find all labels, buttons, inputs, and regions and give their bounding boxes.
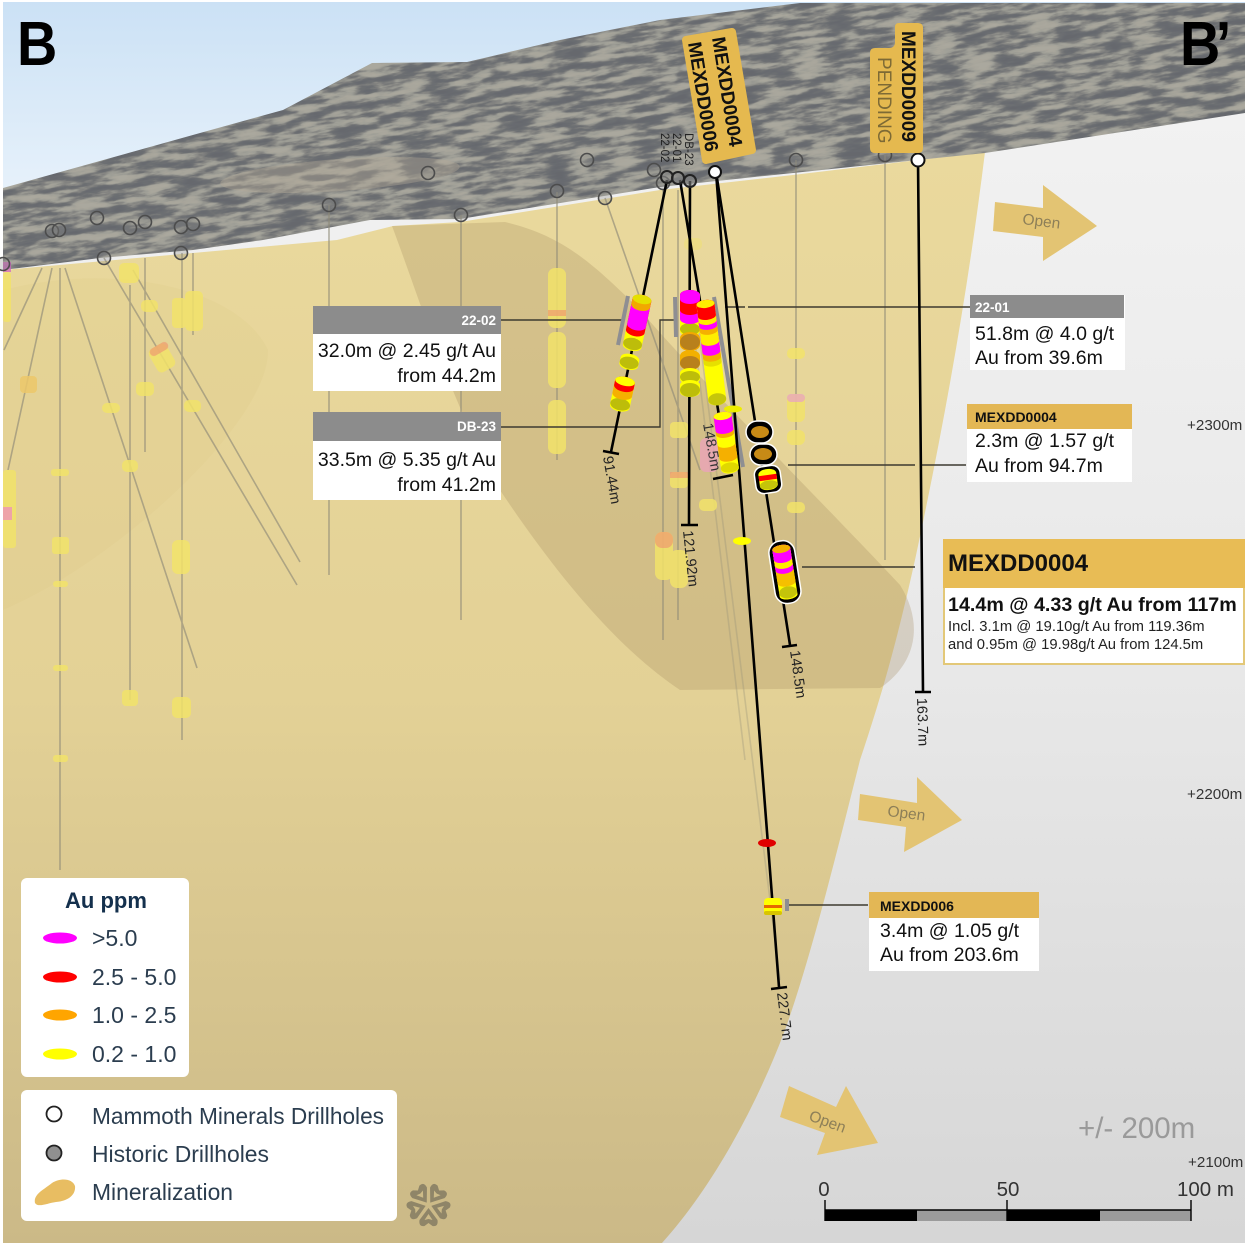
mineralization envelope [3, 152, 985, 1243]
hole trace DB-23 [679, 181, 701, 588]
callout MEXDD006: MEXDD006 [880, 898, 954, 914]
section label B prime: B’ [1180, 10, 1228, 79]
grey intercept bars [618, 296, 787, 911]
hole trace 22-01 [680, 180, 733, 479]
core 22-02 upper [622, 293, 652, 353]
callout MEXDD0004 upper [967, 404, 1132, 482]
legend: Au ppm: 2.5 - 5.0 [92, 964, 176, 990]
hole trace 22-02: 91.44m [599, 455, 623, 505]
section width note: +/- 200m [1078, 1112, 1195, 1145]
callout 22-02: 22-02 [461, 313, 496, 328]
core 22-01 long [696, 299, 727, 406]
core DB-23 stack [680, 290, 700, 397]
callout 22-02: 32.0m @ 2.45 g/t Au [318, 340, 496, 362]
elevation labels: +2100m [1188, 1154, 1243, 1171]
small yellow intercepts [724, 406, 751, 545]
callout MEXDD006: 3.4m @ 1.05 g/t [880, 920, 1020, 942]
faded high-grade bands [3, 262, 805, 548]
company logo mark [406, 1183, 451, 1226]
scale bar: 50 [997, 1178, 1019, 1201]
callout DB-23: DB-23 [457, 419, 496, 434]
collar labels [658, 133, 694, 166]
red intercept [758, 839, 776, 847]
arrow: open upper [993, 185, 1097, 261]
legend: Au ppm [21, 878, 189, 1077]
faint left lens [3, 278, 268, 610]
callout MEXDD0004 main: and 0.95m @ 19.98g/t Au from 124.5m [948, 637, 1203, 653]
arrow: open middle [858, 777, 962, 852]
callout MEXDD0004 upper: Au from 94.7m [975, 455, 1103, 477]
legend: Au ppm: >5.0 [92, 925, 137, 951]
callout 22-01: 51.8m @ 4.0 g/t [975, 323, 1115, 345]
arrow: open upper: Open [1022, 211, 1061, 233]
hole trace MEXDD0006: 227.7m [773, 992, 795, 1042]
core 22-02 lower [609, 375, 636, 413]
callout MEXDD0004 main: Incl. 3.1m @ 19.10g/t Au from 119.36m [948, 619, 1205, 635]
tag: MEXDD0009 pending [870, 23, 923, 153]
legend: features [21, 1090, 397, 1221]
callout 22-01: Au from 39.6m [975, 347, 1103, 369]
historic active collars [661, 171, 696, 187]
callout MEXDD0004 upper: MEXDD0004 [975, 409, 1057, 425]
core 22-02 disc [618, 352, 640, 372]
elevation labels: +2300m [1187, 417, 1242, 434]
historic drillhole collars [0, 148, 892, 270]
historic drillhole traces [4, 155, 885, 980]
outlined core four [767, 539, 803, 605]
arrow: open lower: Open [807, 1108, 848, 1137]
callout MEXDD0004 main [943, 539, 1245, 665]
legend: Au ppm: 0.2 - 1.0 [92, 1041, 176, 1067]
sky [3, 2, 1245, 262]
legend: features: Mammoth Minerals Drillholes [92, 1103, 384, 1129]
legend: features: Historic Drillholes [92, 1141, 269, 1167]
callout MEXDD0004 main: 14.4m @ 4.33 g/t Au from 117m [948, 594, 1237, 616]
inner mineralized lens [392, 222, 914, 690]
tag: MEXDD0004 and MEXDD0006 [683, 32, 752, 160]
legend: Au ppm: Au ppm [65, 888, 147, 913]
collar labels: 22-01 [670, 133, 682, 162]
section label B: B [17, 10, 57, 79]
hole trace 22-02 [599, 180, 667, 505]
hole trace MEXDD0009: 163.7m [913, 698, 931, 746]
hole trace MEXDD0009 [913, 160, 931, 746]
callout MEXDD0004 main: MEXDD0004 [948, 550, 1089, 577]
legend: Au ppm: 1.0 - 2.5 [92, 1002, 176, 1028]
hole trace 22-01: 148.5m [699, 422, 723, 472]
tag: MEXDD0004 and MEXDD0006: MEXDD0004 [707, 35, 746, 149]
Mammoth collars [709, 154, 924, 178]
outlined core disc two [750, 444, 777, 465]
outlined core three [753, 464, 783, 495]
tag: MEXDD0009 pending: MEXDD0009 [897, 31, 918, 142]
collar labels: 22-02 [658, 133, 670, 162]
callout DB-23: 33.5m @ 5.35 g/t Au [318, 449, 496, 471]
callout DB-23 [313, 412, 501, 500]
callout DB-23: from 41.2m [397, 474, 496, 496]
callout MEXDD0004 upper: 2.3m @ 1.57 g/t [975, 430, 1115, 452]
callout 22-01 [970, 295, 1125, 370]
arrow: open lower [780, 1086, 878, 1155]
hole trace MEXDD0004 [716, 172, 809, 699]
callout 22-01: 22-01 [975, 300, 1010, 315]
tag: MEXDD0009 pending: PENDING [873, 57, 894, 144]
arrow: open middle: Open [887, 803, 926, 825]
rock terrain surface [3, 3, 1245, 270]
leader lines [501, 307, 970, 905]
lower yellow intercept [764, 898, 782, 915]
faded historic intercepts [3, 238, 805, 762]
legend: features: Mineralization [92, 1179, 233, 1205]
outlined core disc one [746, 421, 773, 443]
hole trace MEXDD0004: 148.5m [786, 649, 809, 699]
callout 22-02 [313, 306, 501, 391]
elevation labels: +2200m [1187, 786, 1242, 803]
hole trace MEXDD0006 [716, 172, 795, 1042]
hole trace DB-23: 121.92m [679, 530, 701, 588]
scale bar: 0 [818, 1178, 830, 1201]
callout MEXDD006: Au from 203.6m [880, 944, 1019, 966]
scale bar [818, 1178, 1234, 1221]
collar labels: DB-23 [682, 133, 694, 166]
elevation labels [1187, 417, 1243, 1171]
scale bar: 100 m [1177, 1178, 1234, 1201]
tag: MEXDD0004 and MEXDD0006: MEXDD0006 [683, 40, 722, 153]
core 22-01 lower [713, 411, 740, 475]
callout 22-02: from 44.2m [397, 365, 496, 387]
callout MEXDD006 [869, 892, 1039, 971]
